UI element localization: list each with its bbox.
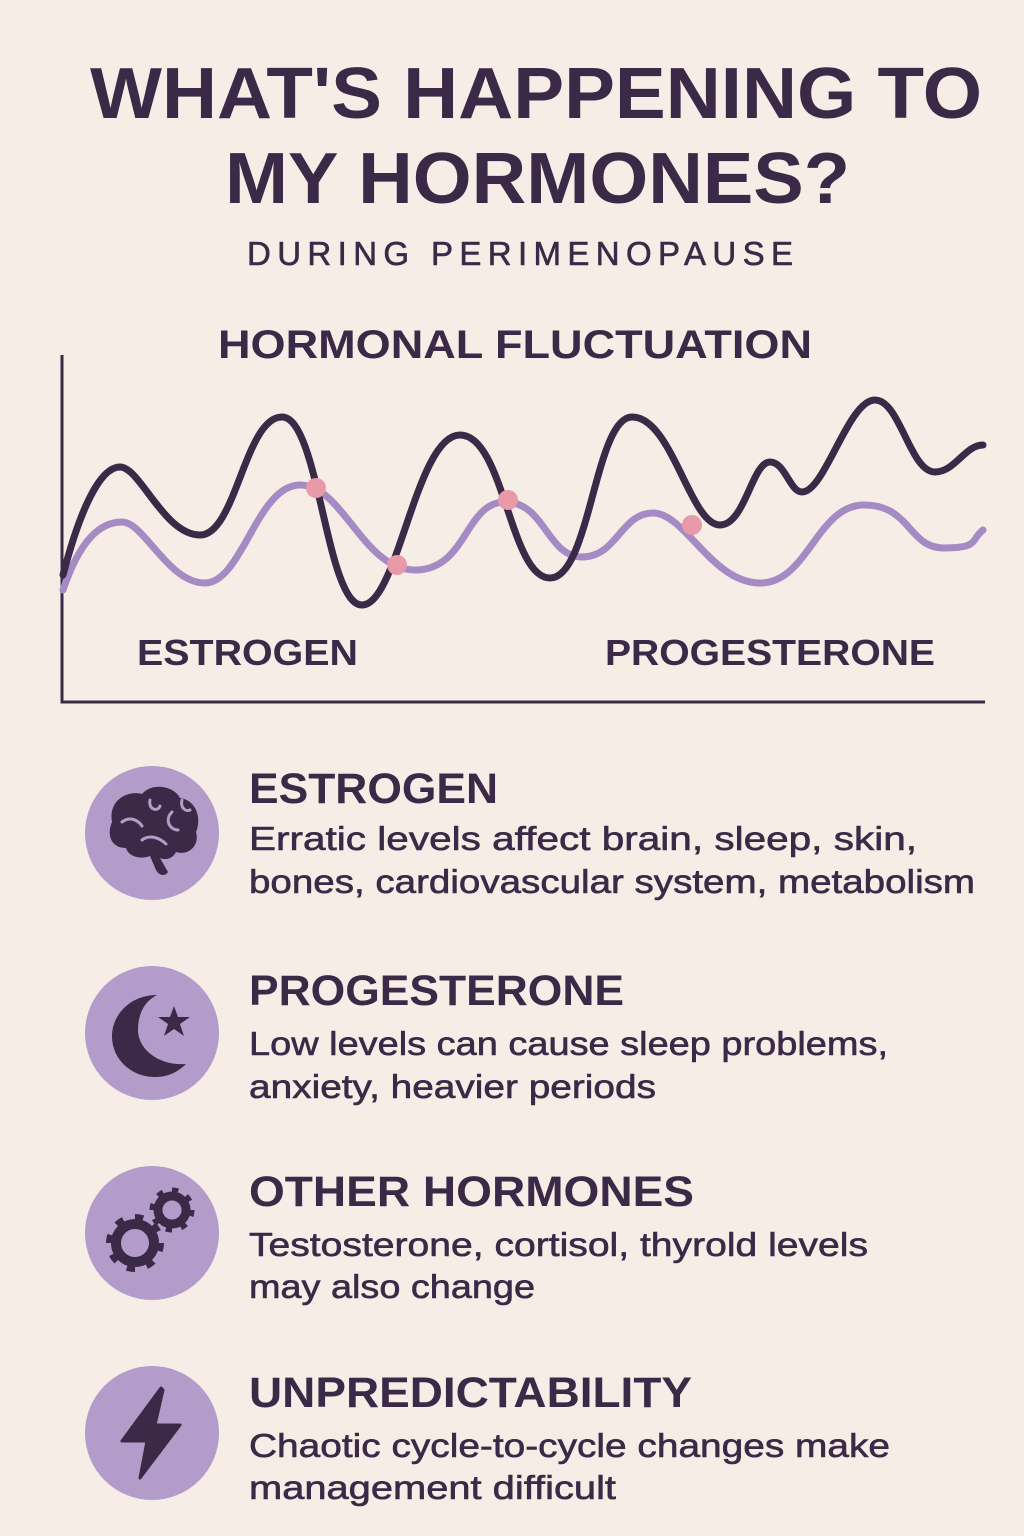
text: anxiety, heavier periods bbox=[249, 1068, 656, 1105]
title: WHAT'S HAPPENING TO bbox=[90, 54, 982, 134]
text bbox=[249, 1427, 890, 1506]
text bbox=[249, 820, 975, 900]
text bbox=[249, 1025, 888, 1105]
item: unpredictability bbox=[85, 1366, 890, 1506]
text: may also change bbox=[249, 1268, 535, 1305]
icon: lightning bolt bbox=[85, 1366, 219, 1500]
heading: OTHER HORMONES bbox=[249, 1168, 694, 1216]
item: other hormones bbox=[85, 1166, 868, 1305]
label: progesterone: PROGESTERONE bbox=[605, 632, 935, 673]
icon: brain bbox=[85, 766, 219, 900]
icon: moon and star bbox=[85, 966, 219, 1100]
item: progesterone bbox=[85, 966, 888, 1105]
heading: ESTROGEN bbox=[249, 765, 498, 813]
chart: hormonal fluctuation bbox=[62, 355, 985, 702]
icon: gears bbox=[85, 1166, 219, 1300]
estrogen curve bbox=[63, 400, 983, 605]
label: estrogen: ESTROGEN bbox=[137, 632, 358, 673]
title bbox=[90, 54, 982, 219]
title: MY HORMONES? bbox=[225, 139, 850, 219]
heading: UNPREDICTABILITY bbox=[249, 1369, 692, 1417]
text: Testosterone, cortisol, thyrold levels bbox=[249, 1226, 868, 1263]
intersection dots bbox=[306, 478, 702, 575]
heading: PROGESTERONE bbox=[249, 967, 624, 1015]
progesterone curve bbox=[63, 485, 983, 590]
text bbox=[249, 1226, 868, 1305]
subtitle: DURING PERIMENOPAUSE bbox=[247, 235, 793, 272]
item: estrogen bbox=[85, 765, 975, 900]
chart heading: HORMONAL FLUCTUATION bbox=[218, 323, 812, 367]
text: Low levels can cause sleep problems, bbox=[249, 1025, 888, 1062]
text: Chaotic cycle-to-cycle changes make bbox=[249, 1427, 890, 1464]
text: Erratic levels affect brain, sleep, skin, bbox=[249, 820, 917, 857]
text: bones, cardiovascular system, metabolism bbox=[249, 863, 975, 900]
text: management difficult bbox=[249, 1469, 616, 1506]
